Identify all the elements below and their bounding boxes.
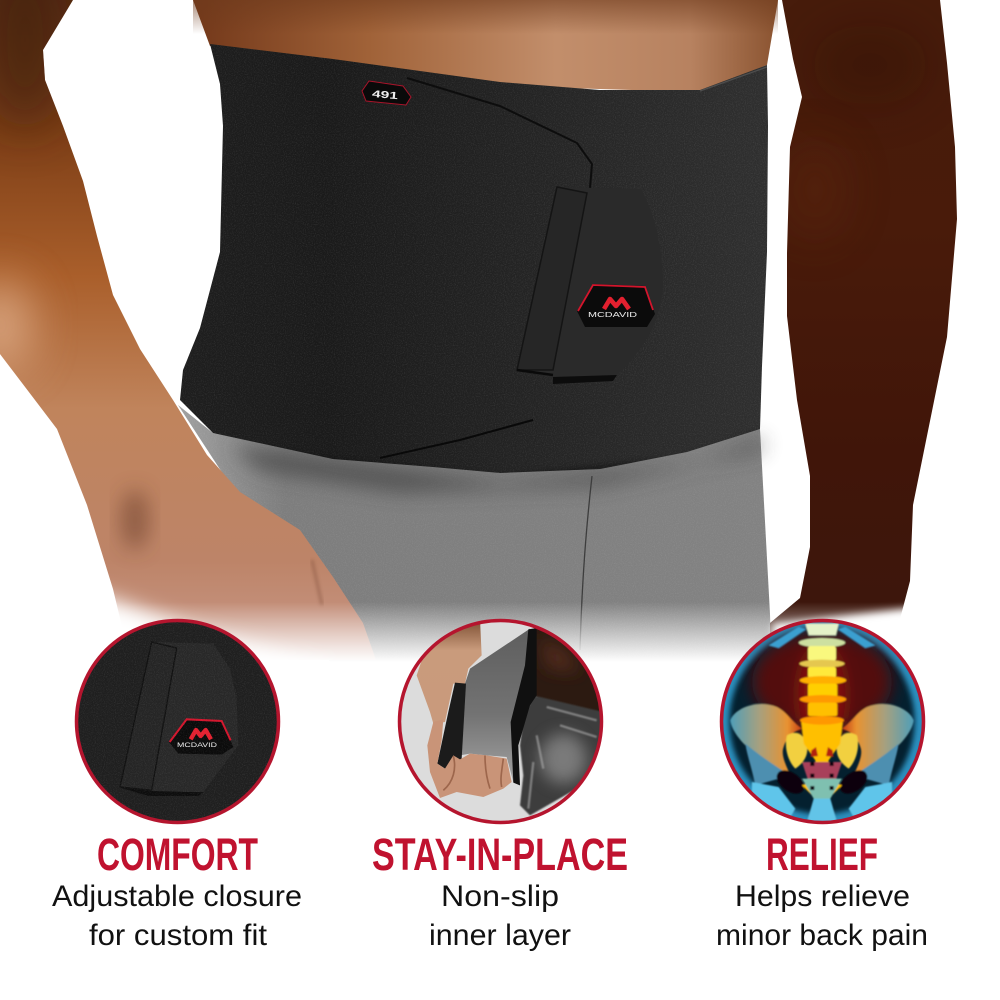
belt lower flap seam — [380, 420, 533, 458]
heading: stay-in-place: STAY-IN-PLACE — [372, 829, 628, 880]
heading: comfort: COMFORT — [97, 829, 258, 880]
model number badge 491: 491 — [372, 89, 399, 102]
photo: athlete wearing waist trimmer — [0, 0, 957, 658]
belt top flap seam — [407, 78, 592, 188]
photo circle: hand holding belt inner layer — [400, 619, 607, 822]
panel: comfort — [52, 612, 302, 952]
text: relief description — [716, 880, 928, 952]
text: comfort description — [52, 880, 302, 952]
grey pants — [178, 405, 772, 680]
text: comfort description: for custom fit — [89, 919, 268, 952]
spine vertebrae — [799, 624, 846, 725]
rib arcs — [769, 627, 806, 648]
bottom white fade — [0, 585, 1000, 710]
dark trousers — [520, 695, 603, 815]
x-ray circle: lower spine and pelvis — [722, 620, 924, 822]
text: relief description: Helps relieve — [735, 880, 910, 913]
arm skin — [417, 619, 482, 724]
panel: stay-in-place — [372, 619, 628, 952]
hip bones and lower pelvis, right — [836, 704, 914, 817]
McDavid logo badge — [577, 284, 655, 327]
text: comfort description: Adjustable closure — [52, 880, 302, 913]
photo circle: closure tab: MCDAVID — [177, 742, 217, 749]
black waist belt — [170, 40, 780, 490]
McDavid logo badge: MCDAVID — [588, 310, 638, 319]
fist — [427, 719, 512, 798]
text: stay-in-place description — [429, 880, 571, 952]
dark torso skin — [536, 629, 600, 712]
model number badge 491 — [362, 81, 411, 105]
belt black tab — [437, 683, 466, 769]
heading: relief: RELIEF — [766, 829, 878, 880]
closure tab — [517, 187, 663, 384]
text: stay-in-place description: Non-slip — [441, 880, 559, 913]
inner non-slip belt — [460, 629, 530, 785]
photo circle: closure tab — [74, 618, 280, 824]
panel: relief — [716, 620, 928, 952]
right arm — [770, 0, 957, 650]
bare torso — [193, 0, 778, 92]
left arm and hand — [0, 0, 376, 660]
hip bones and lower pelvis, left — [730, 704, 808, 817]
text: relief description: minor back pain — [716, 919, 928, 952]
text: stay-in-place description: inner layer — [429, 919, 571, 952]
sacrum — [801, 722, 843, 799]
